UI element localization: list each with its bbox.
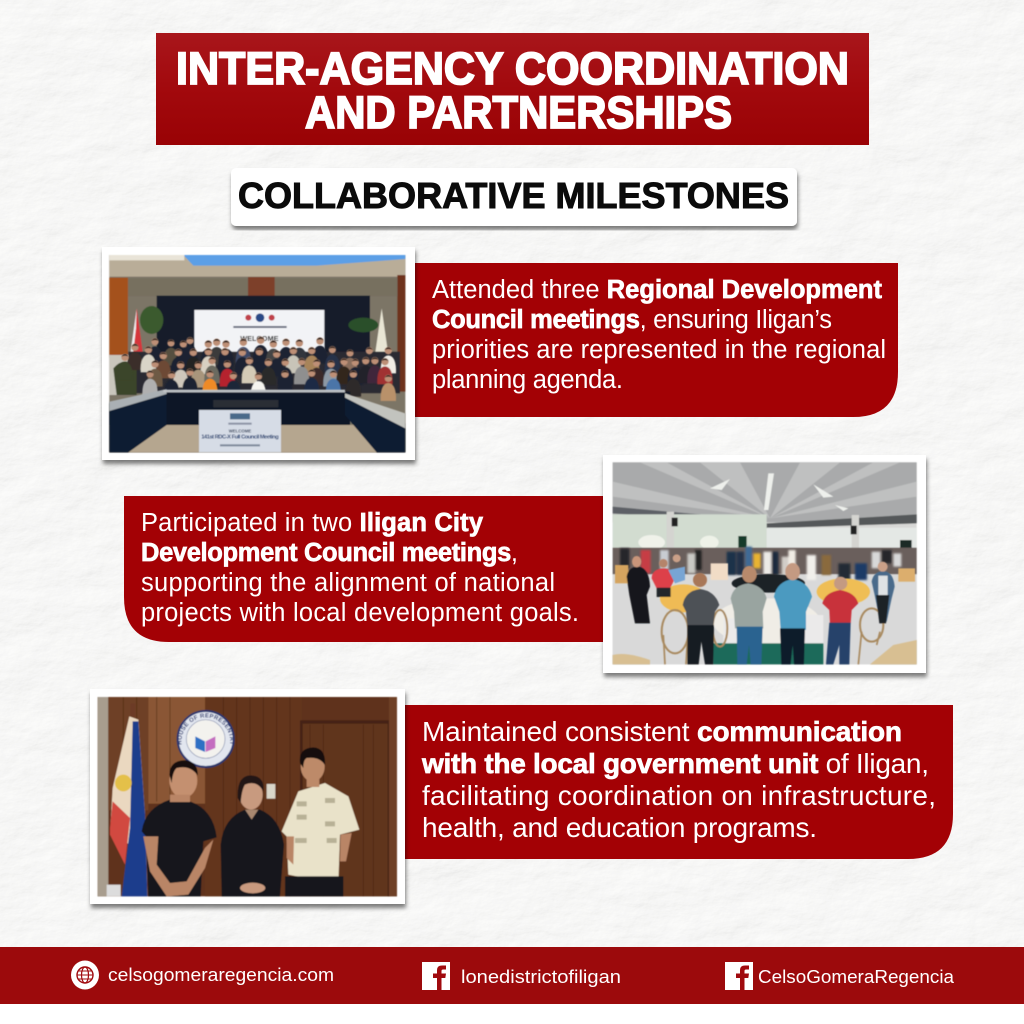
icon: facebook 2 — [725, 962, 753, 990]
website: celsogomeraregencia.com — [108, 964, 334, 985]
photo: council group portrait: 141st RDC-X Full Council Meeting — [201, 435, 279, 441]
man grey — [683, 589, 719, 625]
photo: council group portrait: WELCOME — [229, 429, 251, 434]
title banner — [156, 33, 869, 145]
title banner: INTER-AGENCY COORDINATION — [176, 43, 849, 94]
woman — [221, 810, 284, 896]
text card 3: facilitating coordination on infrastructure, — [422, 780, 936, 811]
text card 3: with the local government unit of Iligan, — [421, 748, 929, 779]
text card 1 — [410, 263, 898, 417]
text card 1: Attended three Regional Development — [432, 276, 882, 304]
photo: three people in office: HOUSE OF REPRESENTATIVES — [178, 712, 234, 745]
title banner: AND PARTNERSHIPS — [305, 87, 732, 138]
page name 2: CelsoGomeraRegencia — [758, 966, 955, 987]
text card 2: projects with local development goals. — [141, 599, 579, 627]
text card 3: Maintained consistent communication — [422, 716, 902, 747]
man right — [282, 783, 359, 885]
footer bar — [0, 947, 1024, 1024]
man blue — [774, 579, 812, 630]
man red — [822, 590, 858, 623]
panel: local government communication — [88, 689, 953, 911]
icon: globe — [71, 960, 99, 990]
text card 2 — [124, 496, 612, 642]
text card 1: planning agenda. — [432, 366, 623, 394]
text card 2: Participated in two Iligan City — [141, 509, 484, 537]
photo: council group portrait — [108, 254, 406, 454]
text card 1: Council meetings, ensuring Iligan’s — [432, 306, 832, 334]
man sage — [731, 583, 767, 628]
text card 1: priorities are represented in the regional — [432, 336, 886, 364]
text card 3 — [400, 705, 953, 859]
icon: facebook 1 — [422, 962, 450, 990]
crowd — [117, 337, 396, 401]
subtitle pill — [231, 168, 797, 226]
photo frame 1 — [102, 247, 415, 460]
man in red — [652, 568, 675, 588]
text card 2: Development Council meetings, — [141, 539, 518, 567]
panel: city development council — [124, 455, 926, 673]
photo frame 2 — [603, 455, 926, 673]
subtitle pill: COLLABORATIVE MILESTONES — [238, 175, 789, 216]
photo: three people in office — [96, 696, 398, 898]
crowd texture — [620, 547, 901, 580]
panel: regional development council — [102, 247, 898, 460]
woman right — [872, 571, 895, 622]
page name 1: lonedistrictofiligan — [461, 966, 621, 987]
photo: council group portrait: WELCOME — [240, 334, 279, 343]
text card 3: health, and education programs. — [422, 812, 817, 843]
text card 2: supporting the alignment of national — [141, 569, 555, 597]
flag — [131, 704, 135, 716]
man left — [142, 800, 217, 896]
seal — [177, 711, 234, 767]
woman left — [627, 567, 650, 623]
photo: tent event — [612, 462, 918, 666]
photo frame 3 — [88, 689, 409, 911]
